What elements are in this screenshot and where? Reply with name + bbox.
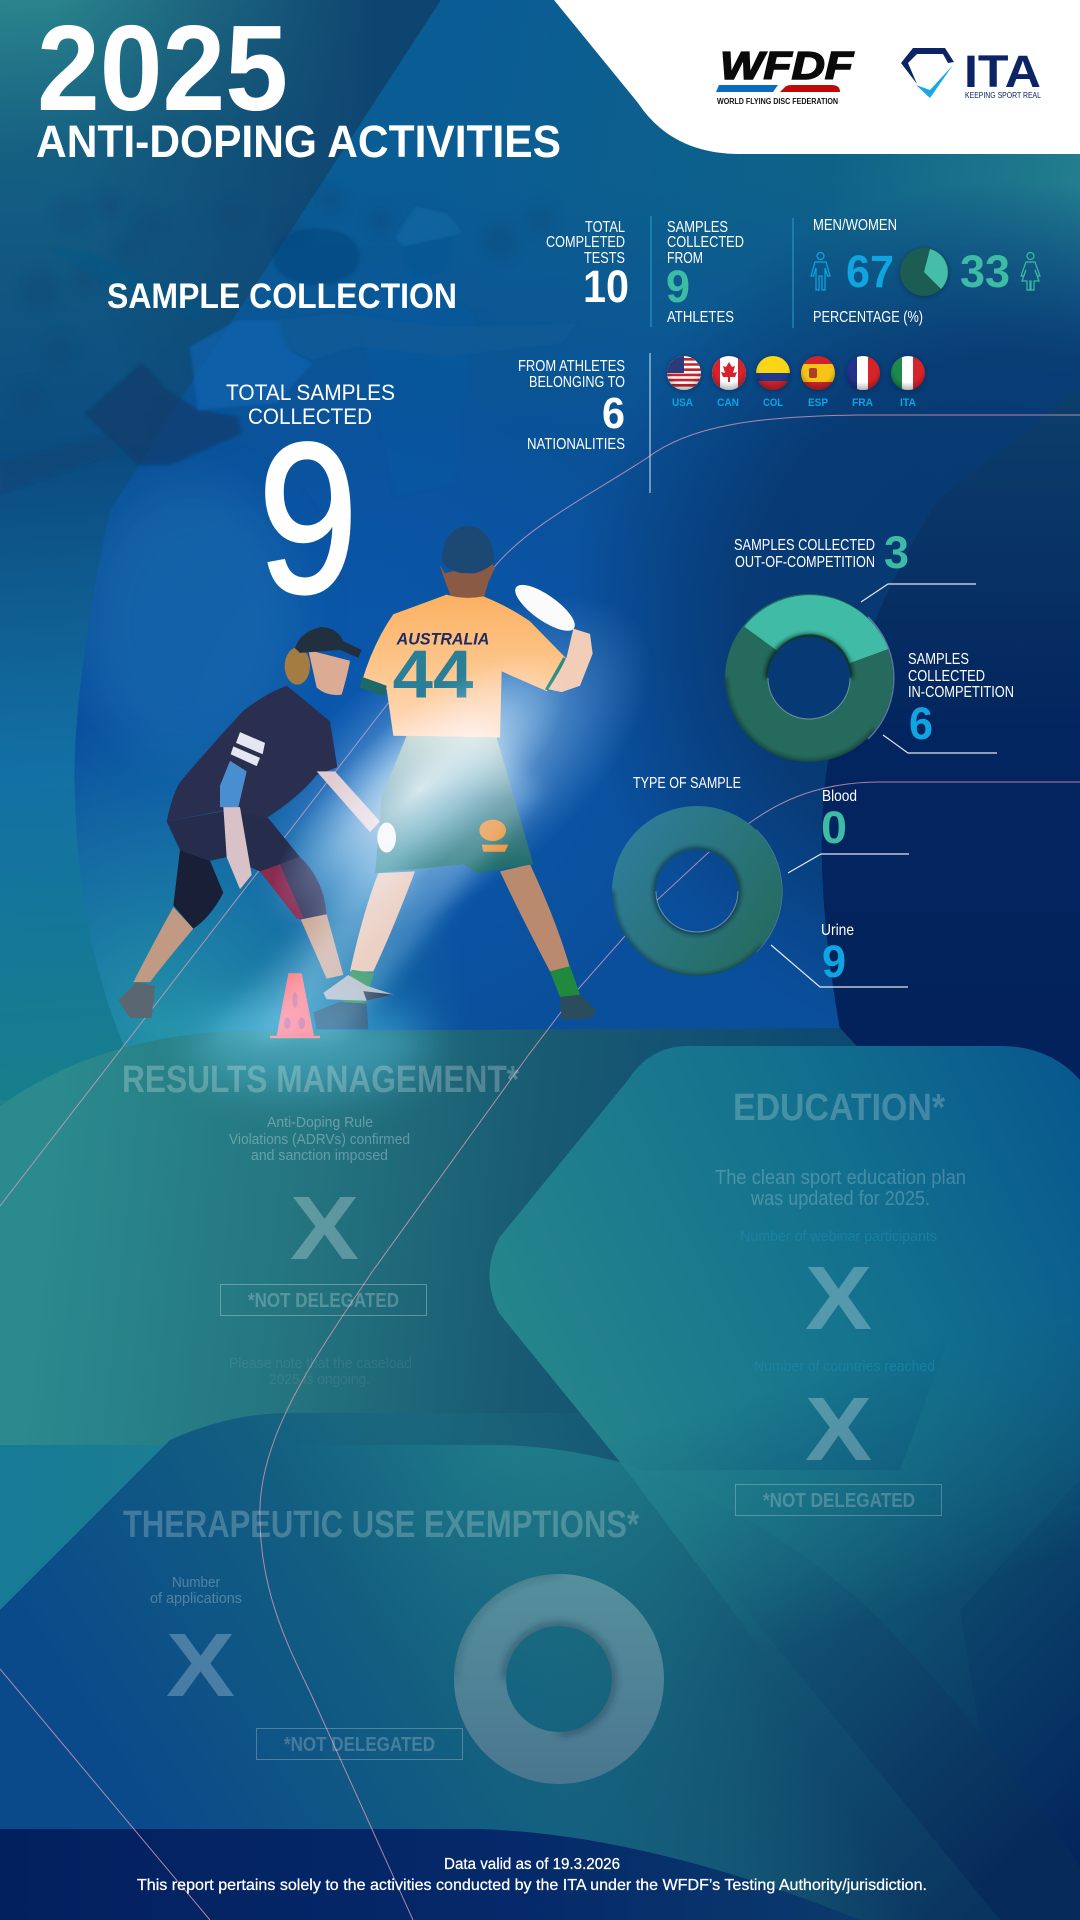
stat: samples collected from athletes: COLLECTED xyxy=(667,234,744,251)
stat: total completed tests: COMPLETED xyxy=(546,234,625,251)
callout: samples collected in-competition: SAMPLES xyxy=(908,651,969,668)
flag: Italy xyxy=(891,356,925,390)
metric: countries reached: X xyxy=(805,1380,872,1480)
flag: Canada xyxy=(712,356,746,390)
players illustration xyxy=(118,526,597,1038)
heading: sample collection: SAMPLE COLLECTION xyxy=(107,277,457,316)
heading: RESULTS MANAGEMENT* xyxy=(122,1059,519,1101)
player: Australia 44: AUSTRALIA xyxy=(396,631,489,649)
flags row: ESP xyxy=(808,397,828,409)
footer note: Data valid as of 19.3.2026 xyxy=(444,1856,620,1873)
description: The clean sport education plan xyxy=(715,1167,966,1189)
description xyxy=(229,1114,410,1164)
white logo corner xyxy=(554,0,1080,154)
callout: samples collected out-of-competition: SAMPLES COLLECTED xyxy=(734,537,875,554)
stat: men and women percentage xyxy=(811,217,1040,326)
callout: blood: 0 xyxy=(821,802,847,853)
section: education xyxy=(715,1087,966,1516)
callout: samples collected in-competition: COLLECTED xyxy=(908,668,985,685)
cone xyxy=(270,973,320,1038)
pie chart: men and women xyxy=(900,248,948,296)
flags row: USA xyxy=(672,397,693,409)
player: Australia 44: 44 xyxy=(393,637,474,712)
title: 2025 xyxy=(37,0,288,136)
flag: France xyxy=(846,356,880,390)
note xyxy=(229,1355,412,1388)
metric: webinar participants: X xyxy=(805,1249,872,1349)
logo: ITA: ITA xyxy=(964,46,1041,97)
decorative pink curves xyxy=(0,415,1080,1920)
lower panel: education shape xyxy=(490,1046,1080,1606)
stat: total completed tests xyxy=(546,219,629,312)
stat: total completed tests: TESTS xyxy=(584,250,625,267)
logo: ITA: KEEPING SPORT REAL xyxy=(965,91,1041,100)
logo: WFDF: WORLD FLYING DISC FEDERATION xyxy=(717,97,838,106)
stat: total samples collected: TOTAL SAMPLES xyxy=(226,380,395,405)
stat: total samples collected: COLLECTED xyxy=(248,404,372,429)
player: Australia 44 xyxy=(313,526,597,1029)
description: was updated for 2025. xyxy=(750,1188,930,1210)
description: Violations (ADRVs) confirmed xyxy=(229,1131,410,1148)
logo: ITA xyxy=(901,46,1041,100)
callout: samples collected in-competition xyxy=(883,651,1014,753)
description: Anti-Doping Rule xyxy=(267,1114,373,1131)
badge: not delegated xyxy=(256,1728,462,1760)
metric: webinar participants: Number of webinar participants xyxy=(740,1228,937,1245)
stat: samples collected from athletes: 9 xyxy=(666,261,690,312)
donut chart: therapeutic use exemptions xyxy=(454,1574,664,1784)
heading: THERAPEUTIC USE EXEMPTIONS* xyxy=(123,1504,639,1546)
badge: not delegated: *NOT DELEGATED xyxy=(248,1290,399,1312)
donut chart: out-of-competition vs in-competition xyxy=(725,594,894,762)
flags row xyxy=(667,356,925,409)
description xyxy=(150,1574,242,1607)
stat: samples collected from athletes: ATHLETES xyxy=(667,309,734,326)
callout: samples collected in-competition: 6 xyxy=(909,698,933,749)
stat: men and women percentage: 33 xyxy=(960,246,1010,297)
note: 2025 is ongoing. xyxy=(269,1371,370,1388)
stat: men and women percentage: MEN/WOMEN xyxy=(813,217,897,234)
badge: not delegated: *NOT DELEGATED xyxy=(763,1490,915,1512)
description: and sanction imposed xyxy=(251,1147,388,1164)
wide glow behind players xyxy=(187,528,713,1012)
callout: samples collected in-competition: IN-COMPETITION xyxy=(908,684,1014,701)
icon: man xyxy=(811,252,830,290)
footer note: This report pertains solely to the activities conducted by the ITA under the WFDF’s Testing Authority/jurisdiction. xyxy=(137,1877,927,1894)
heading: EDUCATION* xyxy=(733,1087,945,1129)
description xyxy=(715,1167,966,1210)
player: USA defender xyxy=(118,627,396,1018)
section: therapeutic use exemptions xyxy=(123,1504,664,1784)
note: Please note that the caseload xyxy=(229,1355,412,1372)
metric: webinar participants xyxy=(740,1228,937,1349)
background photo: blurred crowd and ghost players xyxy=(0,186,577,497)
stat: total completed tests: 10 xyxy=(583,261,629,312)
stat: samples collected from athletes: SAMPLES xyxy=(667,219,728,236)
stat: nationalities: BELONGING TO xyxy=(529,374,625,391)
flag: Spain xyxy=(801,356,835,390)
callout: urine: Urine xyxy=(821,922,854,939)
icon: woman xyxy=(1021,252,1040,290)
stat: samples collected from athletes: FROM xyxy=(667,250,703,267)
callout: blood: Blood xyxy=(822,788,857,805)
flags row: CAN xyxy=(717,397,739,409)
badge: not delegated xyxy=(736,1484,942,1516)
callout: samples collected out-of-competition xyxy=(734,527,976,602)
stat: total samples collected xyxy=(226,380,395,638)
logo: WFDF: WFDF xyxy=(720,45,854,88)
badge: not delegated: *NOT DELEGATED xyxy=(284,1734,435,1756)
stat: nationalities xyxy=(518,358,625,453)
flags row: COL xyxy=(763,397,783,409)
metric: countries reached xyxy=(754,1358,935,1480)
stat: total samples collected: 9 xyxy=(258,399,358,638)
stat: samples collected from athletes xyxy=(666,219,744,326)
callout: samples collected out-of-competition: 3 xyxy=(884,527,909,578)
callout: samples collected out-of-competition: OUT-OF-COMPETITION xyxy=(735,554,875,571)
flag: Colombia xyxy=(756,356,790,390)
title: ANTI-DOPING ACTIVITIES xyxy=(36,116,561,167)
label: type of sample: TYPE OF SAMPLE xyxy=(633,775,741,792)
footer note xyxy=(137,1856,927,1894)
description: of applications xyxy=(150,1590,242,1607)
stat: men and women percentage: PERCENTAGE (%) xyxy=(813,309,923,326)
light rays glow xyxy=(190,611,608,1090)
value: X xyxy=(290,1179,359,1279)
footer band xyxy=(0,1829,860,1920)
callout: urine xyxy=(771,922,908,987)
stat: nationalities: 6 xyxy=(602,389,625,438)
flags row: ITA xyxy=(900,397,916,409)
flag: USA xyxy=(667,356,701,390)
logo: WFDF xyxy=(716,45,854,106)
flags row: FRA xyxy=(852,397,873,409)
stat: total completed tests: TOTAL xyxy=(585,219,625,236)
lower panel: therapeutic use exemptions shape xyxy=(0,1413,1080,1920)
stat: nationalities: FROM ATHLETES xyxy=(518,358,625,375)
section: results management xyxy=(122,1059,519,1388)
badge: not delegated xyxy=(220,1284,426,1316)
value: X xyxy=(166,1616,235,1716)
donut chart: type of sample xyxy=(612,806,782,976)
title xyxy=(36,0,561,167)
callout: urine: 9 xyxy=(822,936,846,987)
stat: nationalities: NATIONALITIES xyxy=(527,436,625,453)
lower panel: results management shape xyxy=(0,1028,1000,1470)
callout: blood xyxy=(788,788,909,873)
metric: countries reached: Number of countries reached xyxy=(754,1358,935,1375)
stat: men and women percentage: 67 xyxy=(846,246,894,297)
description: Number xyxy=(172,1574,220,1591)
